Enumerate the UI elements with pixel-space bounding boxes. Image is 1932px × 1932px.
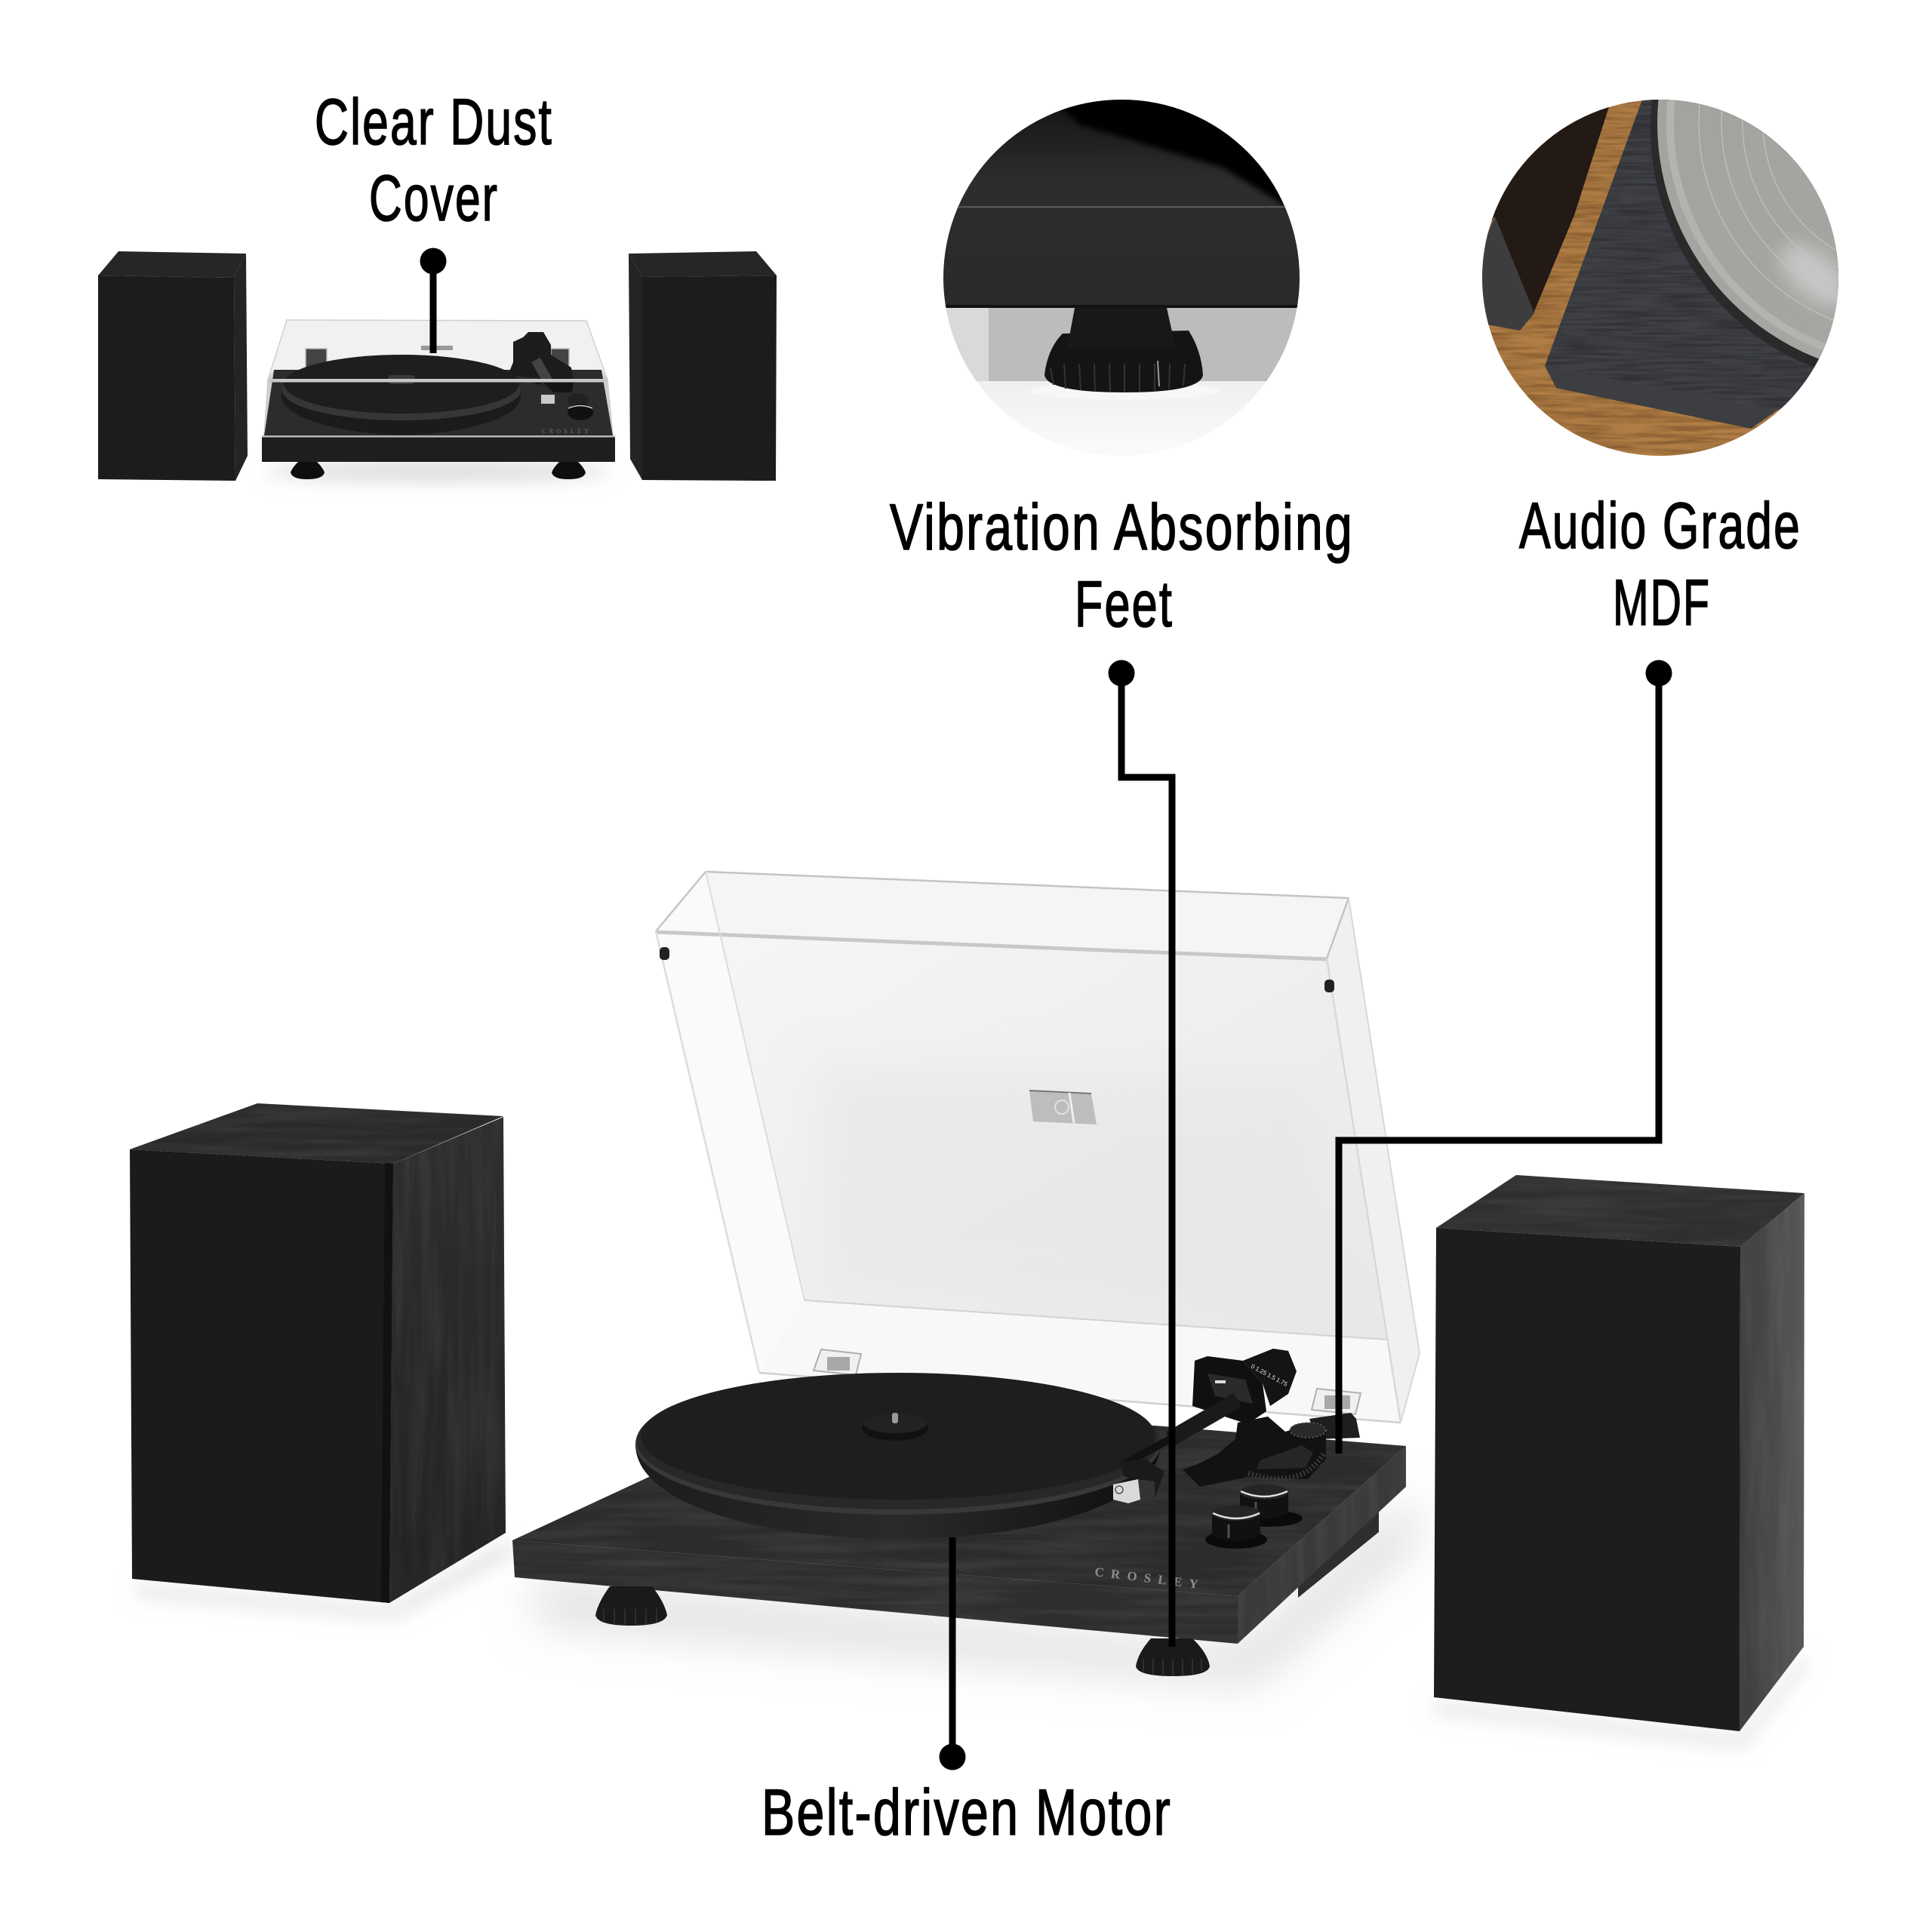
small product view: speakers and closed turntable [98, 251, 777, 481]
floor shadows [136, 1498, 1807, 1747]
arm base plate and pivot [1183, 1417, 1326, 1487]
headshell [1119, 1459, 1164, 1498]
anti-skate dial [1290, 1423, 1326, 1438]
lid front rim [268, 379, 608, 382]
grey vinyl record [1657, 100, 1838, 359]
circle photo: audio grade MDF corner [1482, 100, 1838, 456]
rear hinge [1309, 1413, 1360, 1439]
foot block under side [1298, 1502, 1379, 1598]
small turntable with closed dust cover [262, 320, 615, 481]
brand mark: CROSLEY [1094, 1564, 1199, 1592]
front knob [1205, 1506, 1267, 1549]
label text: Audio Grade MDF: Audio Grade [1519, 490, 1801, 562]
lid top rim [656, 872, 1349, 958]
tracking force scale: 0 1.25 1.5 1.75 [1250, 1363, 1289, 1388]
label text: Clear Dust Cover: Clear Dust [315, 86, 553, 158]
small right speaker [629, 251, 777, 481]
right front foot [1136, 1638, 1210, 1676]
leader: vibration absorbing feet [1108, 660, 1172, 1647]
leader: dust cover [420, 248, 447, 353]
lid bumpers [660, 947, 669, 960]
counterweight [1243, 1349, 1297, 1406]
circle photo: vibration absorbing foot [943, 100, 1300, 457]
small platter [281, 390, 521, 435]
label text: Vibration Absorbing Feet: Feet [1075, 568, 1174, 641]
label text: Clear Dust Cover: Cover [369, 162, 499, 235]
main product view [130, 872, 1807, 1747]
dark speaker corner [1491, 107, 1609, 312]
platter [635, 1373, 1161, 1539]
small brand mark: CROSLEY [542, 428, 589, 435]
platter rim [1651, 100, 1838, 368]
tonearm tube [1170, 1400, 1238, 1439]
small left speaker [98, 251, 248, 481]
cartridge [1113, 1479, 1155, 1503]
leader: audio grade MDF [1339, 660, 1672, 1454]
large right speaker [1434, 1175, 1804, 1731]
label text: Vibration Absorbing Feet: Vibration Absorbing [890, 491, 1354, 564]
plinth top [512, 1426, 1406, 1596]
small feet [291, 462, 325, 479]
callout: Clear Dust Cover [315, 86, 553, 353]
felt mat [641, 1373, 1155, 1500]
left front foot [595, 1586, 667, 1626]
label text: Audio Grade MDF: MDF [1613, 567, 1711, 639]
left speaker top [130, 1103, 503, 1164]
leader: belt-driven motor [939, 1537, 966, 1770]
lid side panels [656, 872, 804, 1373]
black MDF plinth surface [1545, 100, 1849, 411]
label text: Belt-driven Motor: Belt-driven Motor [761, 1777, 1172, 1849]
left speaker front grille [130, 1149, 393, 1603]
tonearm assembly [1113, 1349, 1360, 1549]
turntable plinth [512, 1426, 1406, 1644]
spindle puck [862, 1413, 928, 1441]
label text: Vibration Absorbing Feet [890, 491, 1354, 641]
small knobs [568, 393, 589, 407]
gimbal frame [1192, 1356, 1266, 1424]
open acrylic dust cover [656, 872, 1420, 1423]
right speaker side [1740, 1193, 1804, 1731]
small plinth [262, 435, 615, 462]
label text: Clear Dust Cover [315, 86, 553, 235]
rear knob [1233, 1484, 1303, 1527]
closed dust cover [264, 320, 613, 435]
small tonearm [508, 332, 574, 383]
hinge brackets [814, 1349, 1361, 1414]
reflection patch on lid [1029, 1091, 1097, 1124]
right speaker front grille [1434, 1228, 1740, 1731]
lid edges [656, 872, 1420, 1423]
label text: Audio Grade MDF [1519, 490, 1801, 639]
plinth front [512, 1540, 1238, 1644]
plinth front edge [1545, 366, 1777, 429]
lid back panel [656, 872, 1420, 1423]
rubber foot [1044, 308, 1203, 392]
large left speaker [130, 1103, 506, 1603]
plinth right side [1238, 1446, 1406, 1644]
right speaker top [1436, 1175, 1804, 1247]
gear teeth ring [1248, 1453, 1324, 1478]
left speaker side [389, 1117, 506, 1603]
